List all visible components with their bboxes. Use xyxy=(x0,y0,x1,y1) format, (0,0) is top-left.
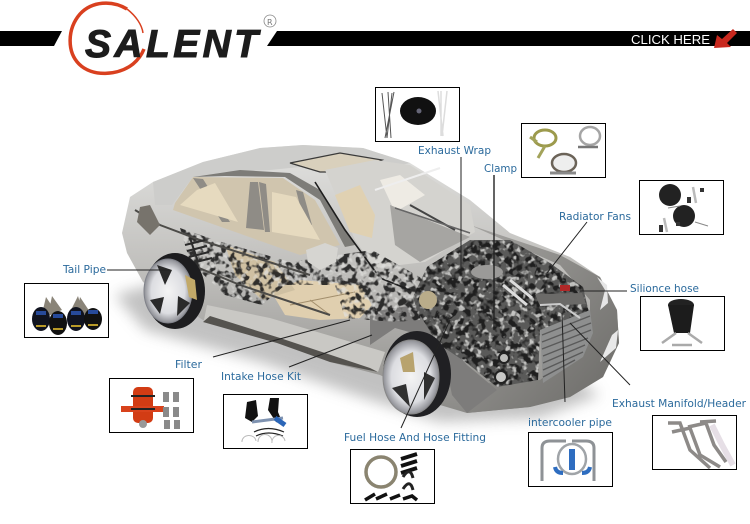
leader lines xyxy=(107,157,630,428)
product: tail pipe xyxy=(24,284,108,338)
logo: SALENT xyxy=(70,3,276,73)
suspension coil xyxy=(185,238,212,263)
rear mechanical cluster xyxy=(180,228,422,322)
product: silence hose xyxy=(640,296,724,350)
label: Tail Pipe: Tail Pipe xyxy=(62,263,106,276)
product: intake hose kit xyxy=(224,394,308,448)
rim xyxy=(144,259,192,323)
product: fuel hose xyxy=(350,450,434,504)
front bumper and fender xyxy=(455,225,619,413)
header bar xyxy=(0,31,750,46)
rear wheel xyxy=(144,253,205,329)
engine top plate and pulleys xyxy=(471,265,503,279)
door sill mechanism xyxy=(135,210,330,315)
tire xyxy=(383,331,451,417)
car shadow xyxy=(115,285,600,422)
product: exhaust wrap xyxy=(376,88,460,142)
product: filter xyxy=(110,378,194,432)
engine bay xyxy=(413,240,590,387)
label: Exhaust Wrap: Exhaust Wrap xyxy=(418,144,491,157)
brake booster xyxy=(419,291,437,309)
headlight xyxy=(597,277,608,310)
tire xyxy=(145,253,205,329)
label: intercooler pipe: intercooler pipe xyxy=(528,416,612,429)
product: exhaust manifold xyxy=(652,416,736,470)
car illustration xyxy=(115,145,619,422)
windshield and front interior xyxy=(325,160,475,268)
mirror xyxy=(306,243,338,270)
product: radiator fans xyxy=(640,180,724,234)
sill xyxy=(204,305,385,372)
rim xyxy=(383,340,439,414)
label: Radiator Fans: Radiator Fans xyxy=(559,210,631,223)
label: Silionce hose: Silionce hose xyxy=(630,282,699,295)
radiator xyxy=(540,310,593,383)
label: Clamp: Clamp xyxy=(484,162,517,175)
label: Intake Hose Kit: Intake Hose Kit xyxy=(221,370,302,383)
click here link xyxy=(631,29,737,48)
A pillar line xyxy=(315,182,410,290)
product: intercooler pipe xyxy=(528,432,612,486)
rear seat base xyxy=(225,245,295,300)
logo: SALENT: SALENT xyxy=(85,23,261,66)
intake pipe xyxy=(535,293,586,306)
logo: SALENT: R xyxy=(267,18,273,27)
product: clamp xyxy=(522,124,606,178)
label: Fuel Hose And Hose Fitting: Fuel Hose And Hose Fitting xyxy=(344,431,486,444)
icon: red arrow xyxy=(714,29,737,48)
car body xyxy=(122,145,619,413)
rear side window interior xyxy=(173,177,340,255)
seats xyxy=(272,280,372,320)
front wheel xyxy=(383,331,451,417)
click here link: CLICK HERE xyxy=(631,32,710,47)
roof and pillars xyxy=(153,145,410,205)
label: Exhaust Manifold/Header: Exhaust Manifold/Header xyxy=(612,397,746,410)
label: Filter: Filter xyxy=(175,358,202,371)
sunroof xyxy=(290,153,382,172)
